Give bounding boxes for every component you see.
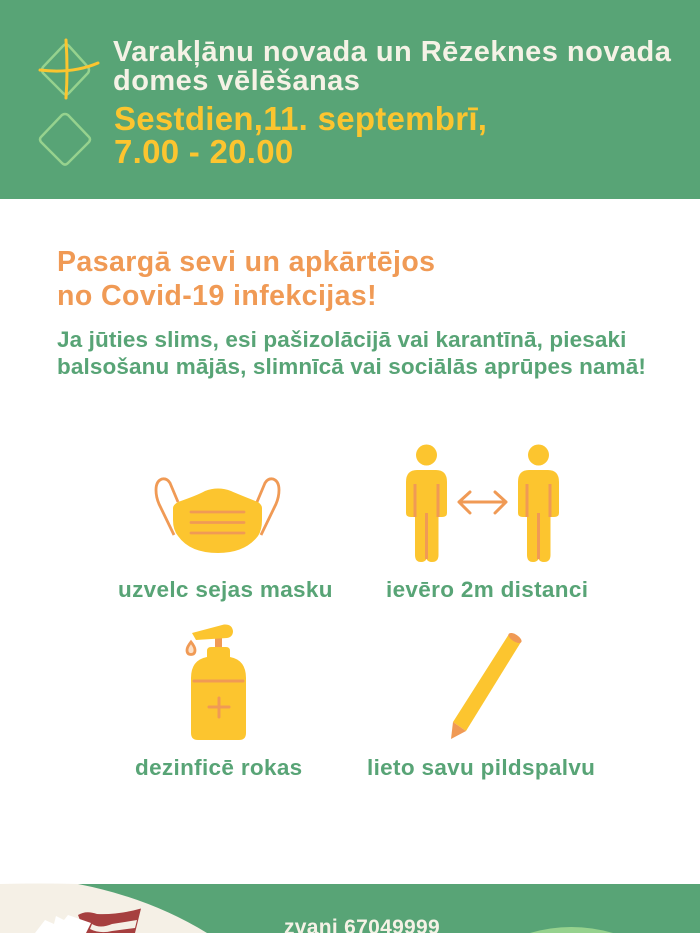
- icon: left person: [406, 444, 447, 562]
- heading: protect yourself: no Covid-19 infekcijas!: [57, 280, 377, 312]
- text block: voting at home: balsošanu mājās, slimnīcā vai sociālās aprūpes namā!: [57, 354, 646, 378]
- icon: light green hill: [530, 927, 613, 933]
- icon: two people at a distance: [406, 444, 559, 562]
- heading: election date and time: Sestdien,11. septembrī,: [114, 100, 487, 137]
- text block: voting at home: [57, 327, 646, 378]
- icon: right person: [518, 444, 559, 562]
- text block: voting at home: Ja jūties slims, esi pašizolācijā vai karantīnā, piesaki: [57, 327, 627, 352]
- icon: marked ballot box: [40, 40, 98, 98]
- icon: face mask: [156, 479, 279, 553]
- heading: election title: domes vēlēšanas: [113, 65, 360, 97]
- icon: pencil: [451, 631, 523, 739]
- icon: sanitizer bottle: [187, 624, 246, 740]
- footer band: [0, 884, 700, 933]
- heading: election date and time: 7.00 - 20.00: [114, 132, 294, 170]
- icon: ballot papers: [35, 915, 91, 933]
- heading: election date and time: [114, 100, 487, 170]
- label: mask: uzvelc sejas masku: [118, 577, 333, 602]
- heading: protect yourself: Pasargā sevi un apkārtējos: [57, 246, 435, 278]
- heading: election title: Varakļānu novada un Rēzeknes novada: [113, 36, 671, 68]
- icon: empty ballot box: [40, 114, 90, 164]
- arrow: two-way distance: [459, 492, 506, 513]
- label: own pen: lieto savu pildspalvu: [367, 755, 595, 780]
- header band: [0, 0, 700, 199]
- icon: cream hill with ballots and flag: [0, 884, 207, 933]
- heading: protect yourself: [57, 246, 435, 312]
- label: distance: ievēro 2m distanci: [386, 577, 588, 602]
- icon: Latvian flag: [78, 908, 141, 933]
- label: disinfect: dezinficē rokas: [135, 755, 303, 780]
- heading: election title: [113, 36, 672, 97]
